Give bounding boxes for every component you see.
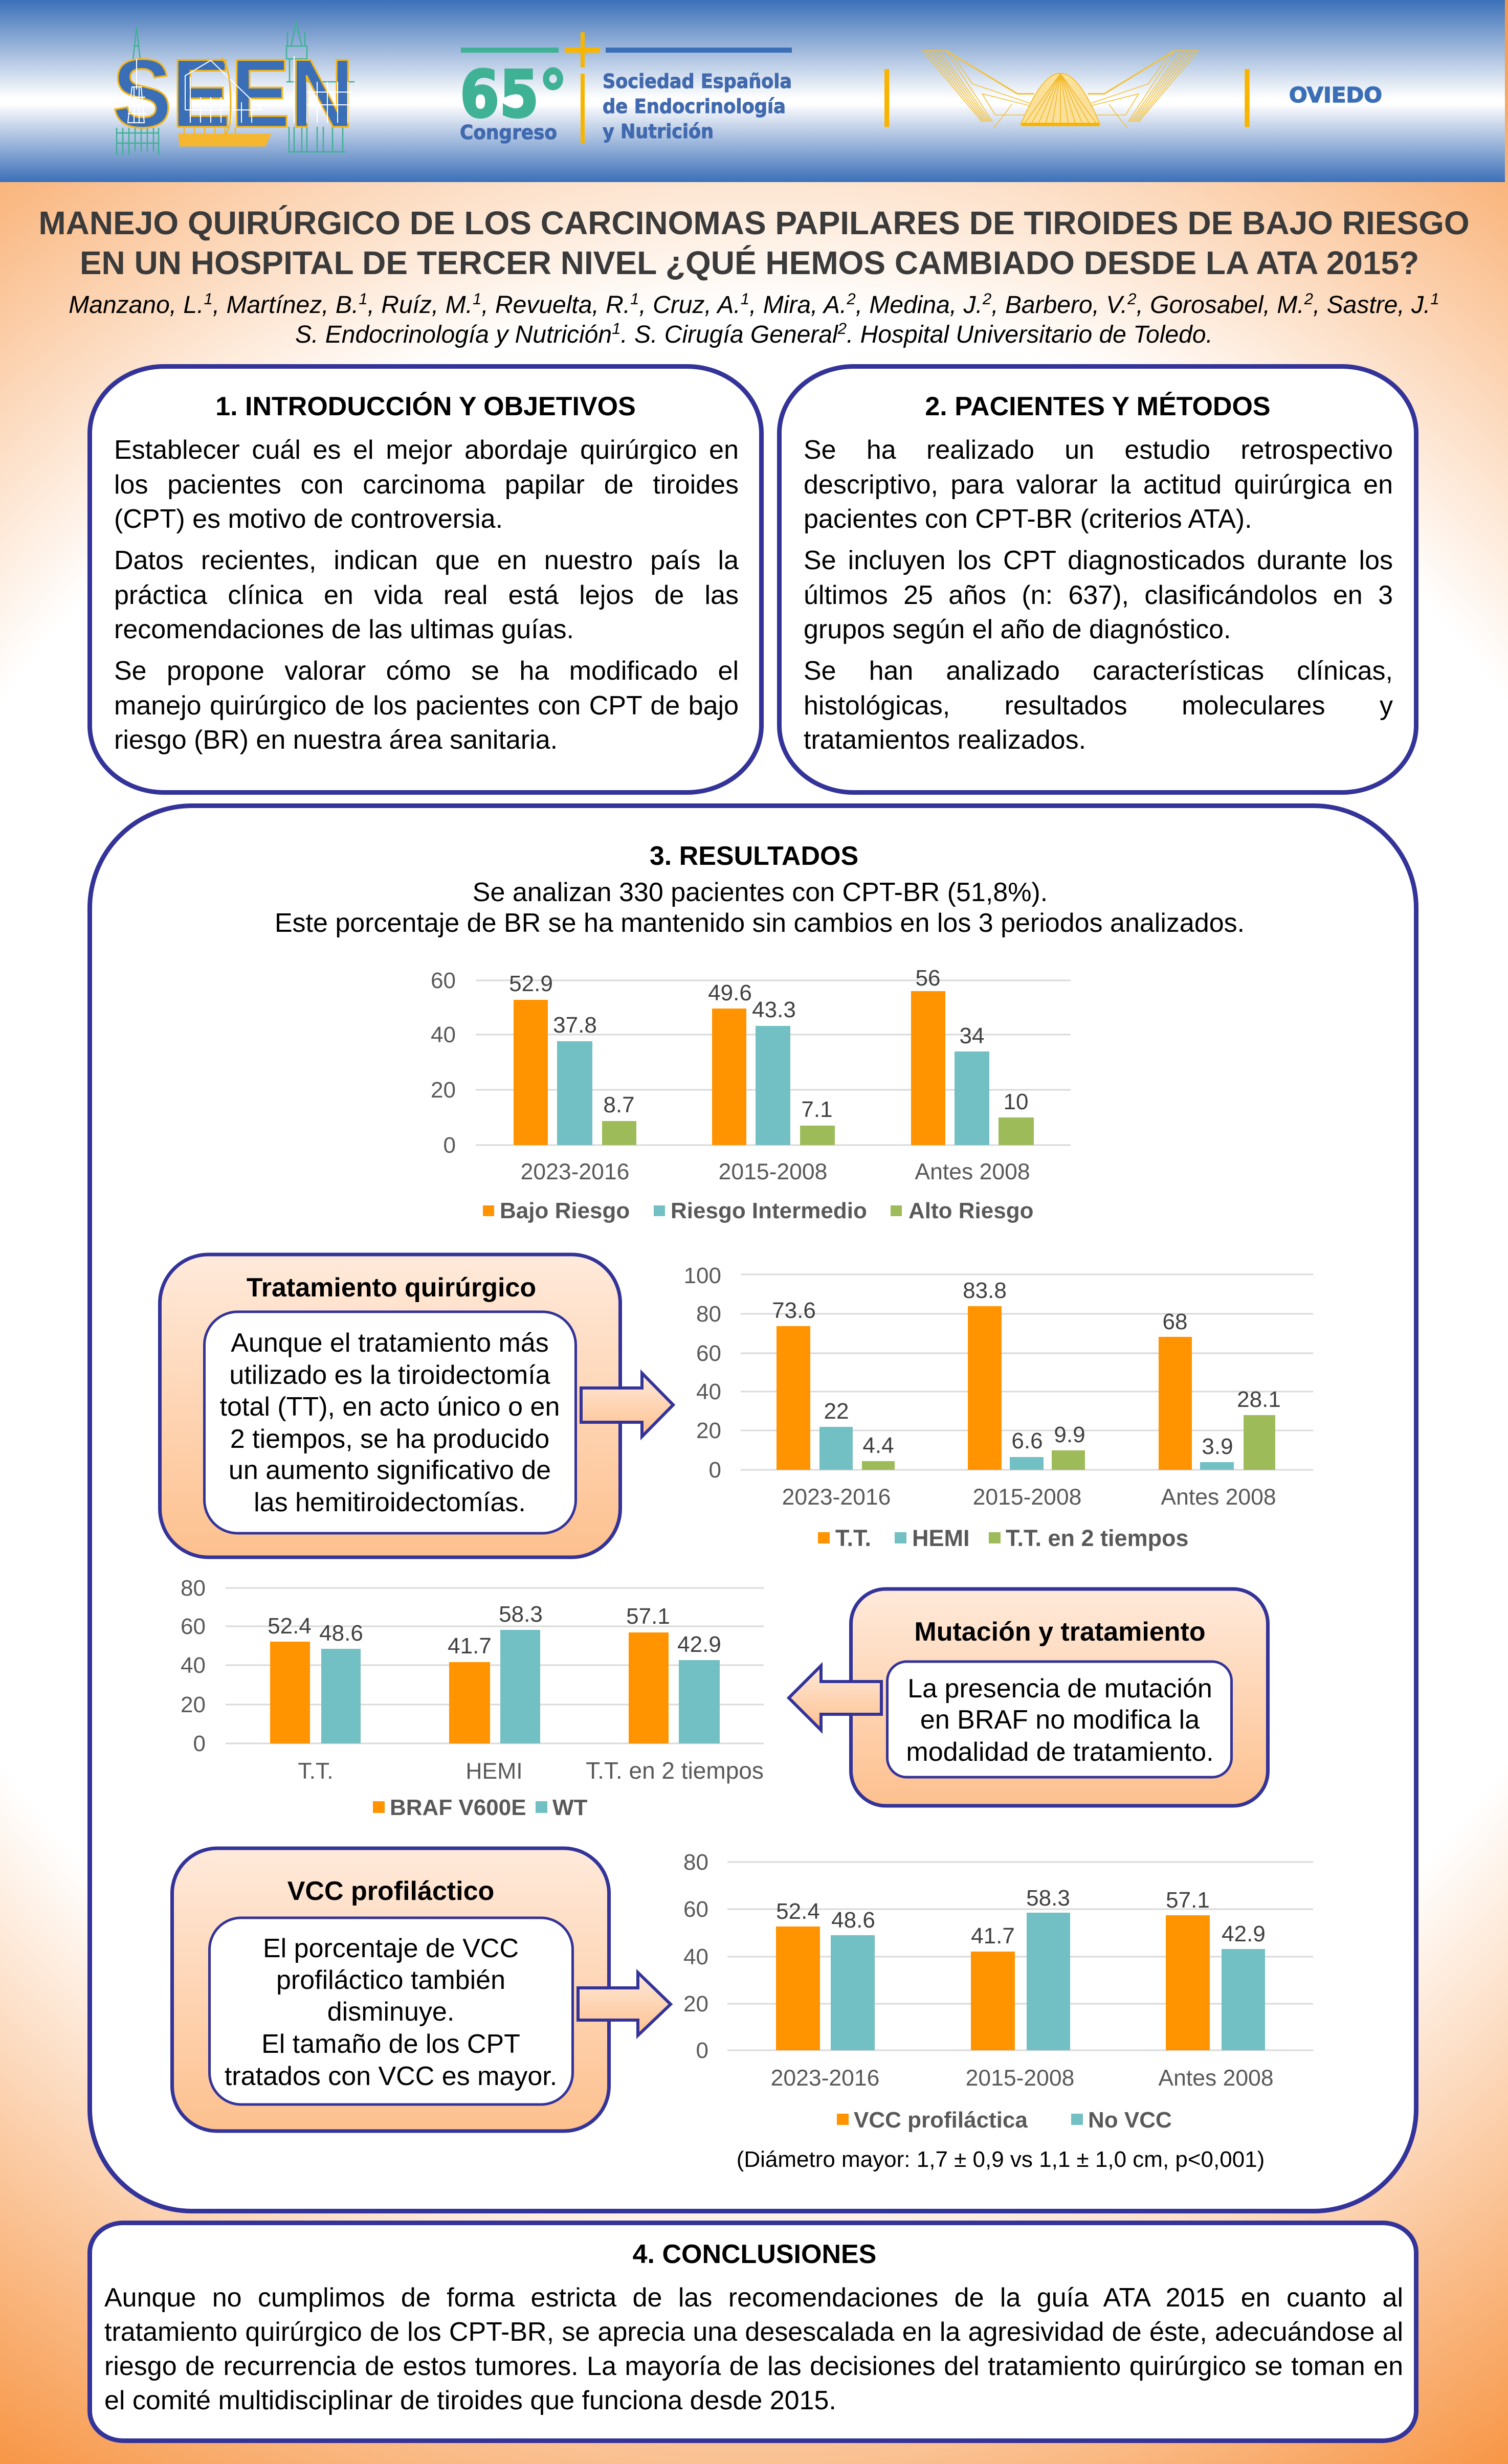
legend: VCC: VCC profiláctica (854, 2108, 1028, 2133)
bar chart: risk by period: 0 (443, 1133, 456, 1158)
bar chart: BRAF mutation by surgery type: 48.6 (319, 1621, 363, 1646)
legend: surgery type: HEMI (912, 1525, 970, 1551)
bar chart: surgery type by period: 28.1 (1237, 1387, 1281, 1412)
bar chart: surgery type by period: 40 (696, 1379, 721, 1404)
text block: conclusions: riesgo de recurrencia de estos tumores. La mayoría de las decisiones del tratamiento quirúrgico se toman en (104, 2351, 1403, 2381)
panel: tratamiento quirúrgico (160, 1255, 620, 1557)
bar chart: surgery type by period: 6.6 (1011, 1428, 1043, 1453)
logo: 65 Congreso SEEN: de Endocrinología (603, 95, 786, 118)
title: EN UN HOSPITAL DE TERCER NIVEL ¿QUÉ HEMOS CAMBIADO DESDE LA ATA 2015? (80, 244, 1419, 281)
text block: paragraph 3 (114, 656, 739, 755)
bar chart: BRAF mutation by surgery type: 42.9 (677, 1632, 721, 1657)
heading: resultados: 3. RESULTADOS (650, 841, 858, 871)
bar chart: surgery type by period (684, 1263, 1313, 1551)
arrow: tratamiento to chart (581, 1373, 673, 1437)
bar chart: surgery type by period: 100 (684, 1263, 721, 1288)
bar chart: prophylactic VCC by period: 52.4 (776, 1899, 820, 1924)
bar chart: surgery type by period: 4.4 (862, 1433, 894, 1458)
bar chart: BRAF mutation by surgery type: 41.7 (448, 1633, 492, 1659)
panel: resultados (87, 803, 1418, 2213)
bar chart: surgery type by period: 3.9 (1202, 1434, 1233, 1459)
text block: VCC: disminuye. (327, 1997, 454, 2027)
text block: paragraph 2: práctica clínica en vida real está lejos de las (114, 580, 739, 610)
text block: tratamiento: total (TT), en acto único o en (220, 1392, 560, 1422)
legend: surgery type: T.T. (835, 1525, 871, 1551)
bar chart: prophylactic VCC by period: 0 (696, 2038, 708, 2063)
bar chart: prophylactic VCC by period: Antes 2008 (1158, 2066, 1274, 2091)
bar chart: surgery type by period: Antes 2008 (1161, 1485, 1276, 1510)
bar chart: prophylactic VCC by period: 80 (683, 1850, 708, 1875)
text block: tratamiento: utilizado es la tiroidectomía (229, 1360, 550, 1390)
heading: pacientes y métodos: 2. PACIENTES Y MÉTODOS (925, 392, 1271, 421)
panel: conclusiones (87, 2221, 1418, 2443)
logo text: OVIEDO: OVIEDO (1289, 83, 1382, 107)
bar chart: BRAF mutation by surgery type: 58.3 (499, 1602, 543, 1627)
bar chart: surgery type by period: 9.9 (1054, 1422, 1085, 1447)
text block: VCC: El porcentaje de VCC (263, 1934, 519, 1963)
bar chart: BRAF mutation by surgery type: 52.4 (268, 1614, 312, 1639)
text block: paragraph 2 (114, 546, 739, 644)
text block: paragraph 3: tratamientos realizados. (804, 725, 1086, 755)
bar chart: surgery type by period: 68 (1163, 1309, 1187, 1334)
text block: mutación: La presencia de mutación (907, 1674, 1212, 1704)
text block: tratamiento (220, 1328, 560, 1517)
bar chart: risk by period: 37.8 (553, 1013, 597, 1038)
bar chart: BRAF mutation by surgery type: 80 (181, 1576, 206, 1601)
bar chart: BRAF mutation by surgery type: T.T. (298, 1759, 334, 1784)
text block: VCC: profiláctico también (276, 1965, 505, 1995)
bar chart: surgery type by period: 20 (696, 1418, 721, 1443)
bar chart: prophylactic VCC by period: 60 (683, 1897, 708, 1922)
bar chart: prophylactic VCC by period: 57.1 (1166, 1888, 1210, 1913)
bar chart: surgery type by period: 0 (709, 1458, 721, 1483)
bar chart: BRAF mutation by surgery type: 40 (181, 1653, 206, 1678)
bar chart: risk by period: 2015-2008 (719, 1159, 827, 1184)
panel: introducción y objetivos (87, 364, 764, 795)
text block: paragraph 1: (CPT) es motivo de controversia. (114, 504, 503, 534)
legend: risk: Riesgo Intermedio (671, 1198, 867, 1223)
text block: conclusions (104, 2281, 1403, 2418)
text block: results summary (275, 878, 1245, 938)
heading: tratamiento quirúrgico: Tratamiento quirúrgico (247, 1273, 536, 1303)
bar chart: surgery type by period: 73.6 (772, 1298, 816, 1323)
text block: paragraph 1: Se ha realizado un estudio retrospectivo (804, 435, 1393, 465)
text block: paragraph 1: descriptivo, para valorar la actitud quirúrgica en (804, 469, 1393, 499)
legend: BRAF: BRAF V600E (390, 1795, 526, 1820)
bar chart: BRAF mutation by surgery type: HEMI (465, 1759, 523, 1784)
text block: conclusions: tratamiento quirúrgico de los CPT-BR, se aprecia una desescalada en la agresividad de éste, adecuándose al (104, 2317, 1403, 2347)
text block: paragraph 2: recomendaciones de las ultimas guías. (114, 615, 574, 644)
logo: 65 Congreso SEEN: Congreso (460, 121, 557, 144)
text block: mutación (906, 1674, 1214, 1767)
bar chart: surgery type by period: 2015-2008 (973, 1485, 1081, 1510)
text block: paragraph 2: grupos según el año de diagnóstico. (804, 615, 1231, 644)
text block: paragraph 1: los pacientes con carcinoma papilar de tiroides (114, 469, 739, 499)
text block: paragraph 1 (114, 435, 739, 534)
text block: conclusions: Aunque no cumplimos de forma estricta de las recomendaciones de la guía ATA 2015 en cuanto al (104, 2283, 1403, 2313)
bar chart: risk by period: 52.9 (509, 971, 553, 996)
authors and affiliations: S. Endocrinología y Nutrición1. S. Cirugía General2. Hospital Universitario de Toledo. (295, 320, 1213, 348)
bar chart: risk by period: 8.7 (603, 1092, 635, 1117)
text block: tratamiento: Aunque el tratamiento más (231, 1328, 549, 1358)
logo: 65 Congreso SEEN: 65° (460, 56, 567, 132)
text block: VCC: El tamaño de los CPT (261, 2029, 520, 2059)
bar chart: BRAF mutation by surgery type: 60 (181, 1614, 206, 1639)
text block: paragraph 2: últimos 25 años (n: 637), clasificándolos en 3 (804, 580, 1393, 610)
bar chart: prophylactic VCC by period: 41.7 (971, 1923, 1015, 1948)
legend: VCC (837, 2108, 1172, 2133)
text block: results summary: Este porcentaje de BR se ha mantenido sin cambios en los 3 periodos analizados. (275, 908, 1245, 938)
authors and affiliations: Manzano, L.1, Martínez, B.1, Ruíz, M.1, Revuelta, R.1, Cruz, A.1, Mira, A.2, Medina, J.2, Barbero, V.2, Gorosabel, M.2, Sastre, J.1 (69, 290, 1439, 319)
text block: paragraph 3: histológicas, resultados moleculares y (804, 690, 1393, 720)
bar chart: risk by period: 34 (960, 1023, 984, 1048)
bar chart: risk by period: 49.6 (708, 980, 752, 1005)
bar chart: BRAF mutation by surgery type (181, 1576, 764, 1820)
panel: pacientes y métodos (777, 364, 1418, 795)
bar chart: risk by period: 60 (431, 968, 456, 993)
legend: surgery type: T.T. en 2 tiempos (1006, 1525, 1189, 1551)
bar chart: surgery type by period: 2023-2016 (782, 1485, 891, 1510)
bar chart: risk by period: 2023-2016 (521, 1159, 629, 1184)
bar chart: surgery type by period: 22 (824, 1399, 849, 1424)
legend: risk (483, 1198, 1033, 1223)
bar chart: BRAF mutation by surgery type: 20 (181, 1692, 206, 1717)
bar chart: prophylactic VCC by period: 48.6 (831, 1908, 875, 1933)
bar chart: prophylactic VCC by period (683, 1850, 1313, 2133)
panel: VCC profiláctico (172, 1848, 609, 2131)
bar chart: risk by period: 10 (1004, 1089, 1028, 1114)
bar chart: BRAF mutation by surgery type: T.T. en 2 tiempos (586, 1757, 764, 1784)
text block: paragraph 2: Datos recientes, indican que en nuestro país la (114, 546, 739, 575)
bar chart: surgery type by period: 83.8 (963, 1278, 1007, 1303)
bar chart: risk by period: 40 (431, 1022, 456, 1047)
logo: 65 Congreso SEEN (460, 32, 792, 144)
bar chart: BRAF mutation by surgery type: 0 (193, 1731, 206, 1756)
header banner with congress logos (0, 0, 1505, 182)
bar chart: prophylactic VCC by period: 2023-2016 (771, 2066, 879, 2091)
bar chart: risk by period: 43.3 (752, 997, 796, 1022)
legend: surgery type (818, 1525, 1189, 1551)
text block: paragraph 3: riesgo (BR) en nuestra área sanitaria. (114, 725, 558, 755)
bar chart: prophylactic VCC by period: 2015-2008 (966, 2066, 1074, 2091)
text block: paragraph 1 (804, 435, 1393, 534)
title (38, 205, 1470, 281)
legend: VCC: No VCC (1088, 2108, 1172, 2133)
text block: paragraph 2: Se incluyen los CPT diagnosticados durante los (804, 546, 1393, 575)
title: MANEJO QUIRÚRGICO DE LOS CARCINOMAS PAPILARES DE TIROIDES DE BAJO RIESGO (38, 205, 1470, 241)
legend: risk: Alto Riesgo (908, 1198, 1033, 1223)
bar chart: risk by period: 7.1 (801, 1097, 833, 1122)
text block: paragraph 3: Se propone valorar cómo se ha modificado el (114, 656, 739, 686)
logo: Oviedo gold building (884, 51, 1250, 128)
heading: mutación y tratamiento: Mutación y tratamiento (914, 1617, 1206, 1647)
bar chart: prophylactic VCC by period: 20 (683, 1991, 708, 2017)
arrow: VCC to chart (578, 1973, 671, 2035)
text block: tratamiento: las hemitiroidectomías. (254, 1488, 526, 1517)
logo: 65 Congreso SEEN: y Nutrición (603, 120, 714, 143)
text block: conclusions: el comité multidisciplinar de tiroides que funciona desde 2015. (104, 2386, 836, 2415)
text block: paragraph 1: pacientes con CPT-BR (criterios ATA). (804, 504, 1252, 534)
text block: paragraph 3 (804, 656, 1393, 755)
authors and affiliations (69, 290, 1439, 348)
text block: VCC: tratados con VCC es mayor. (225, 2062, 557, 2091)
text block: mutación: modalidad de tratamiento. (906, 1737, 1214, 1767)
panel: mutación y tratamiento (851, 1589, 1268, 1806)
bar chart: risk by period: Antes 2008 (915, 1159, 1030, 1184)
bar chart: prophylactic VCC by period: 58.3 (1026, 1886, 1070, 1911)
text block: paragraph 3: manejo quirúrgico de los pacientes con CPT de bajo (114, 690, 739, 720)
legend: risk: Bajo Riesgo (500, 1198, 630, 1223)
note: tumor diameter: (Diámetro mayor: 1,7 ± 0,9 vs 1,1 ± 1,0 cm, p<0,001) (737, 2147, 1265, 2172)
heading: introducción: 1. INTRODUCCIÓN Y OBJETIVOS (215, 392, 636, 421)
logo: SEEN with towers: SEEN (113, 39, 354, 148)
text block: tratamiento: un aumento significativo de (229, 1455, 551, 1485)
text block: results summary: Se analizan 330 pacientes con CPT-BR (51,8%). (473, 878, 1048, 907)
text block: tratamiento: 2 tiempos, se ha producido (230, 1424, 549, 1454)
text block: VCC (225, 1934, 557, 2091)
bar chart: prophylactic VCC by period: 42.9 (1222, 1921, 1266, 1946)
arrow: mutación to chart (789, 1666, 881, 1730)
legend: BRAF (373, 1795, 588, 1820)
bar chart: surgery type by period: 80 (696, 1302, 721, 1327)
bar chart: BRAF mutation by surgery type: 57.1 (626, 1604, 670, 1629)
text block: paragraph 3: Se han analizado características clínicas, (804, 656, 1393, 686)
text block: paragraph 2 (804, 546, 1393, 644)
bar chart: risk by period: 56 (916, 966, 940, 991)
logo: 65 Congreso SEEN: Sociedad Española (603, 70, 792, 93)
heading: conclusiones: 4. CONCLUSIONES (633, 2239, 876, 2269)
bar chart: prophylactic VCC by period: 40 (683, 1944, 708, 1969)
legend: BRAF: WT (552, 1795, 588, 1820)
heading: VCC profiláctico: VCC profiláctico (287, 1876, 494, 1906)
bar chart: risk by period: 20 (431, 1078, 456, 1103)
text block: mutación: en BRAF no modifica la (920, 1705, 1200, 1735)
bar chart: risk by period (431, 966, 1071, 1223)
text block: paragraph 1: Establecer cuál es el mejor abordaje quirúrgico en (114, 435, 739, 465)
bar chart: surgery type by period: 60 (696, 1341, 721, 1366)
